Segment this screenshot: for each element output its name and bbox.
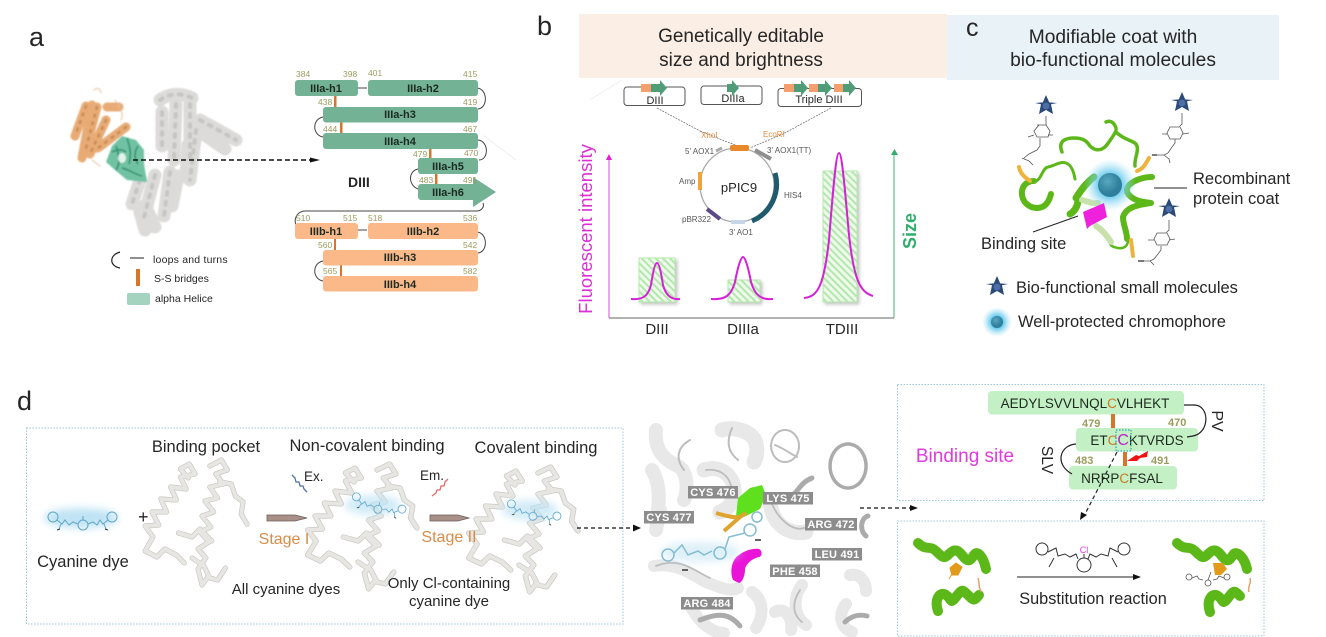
x labels: TDIII	[826, 321, 858, 338]
residue numbers: 415	[463, 69, 477, 79]
numbers: 479	[1082, 418, 1100, 430]
x labels: DIIIa	[727, 321, 759, 338]
stage arrows	[267, 515, 469, 521]
headings: Binding pocket	[152, 438, 261, 456]
pocket protein	[145, 460, 247, 585]
numbers: 483	[1075, 455, 1093, 467]
residue numbers	[296, 68, 478, 276]
linker molecules	[1022, 113, 1189, 265]
plasmid map pPIC9: EcoRI	[763, 130, 785, 139]
residue tags: LEU 491	[815, 549, 859, 561]
arrow pocket view to binding site	[860, 505, 918, 511]
recombinant label	[1154, 170, 1291, 208]
green helices	[295, 80, 496, 207]
plasmid map pPIC9: HIS4	[784, 191, 802, 200]
binding site strand	[1083, 203, 1107, 229]
axes	[606, 149, 898, 318]
plasmid inserts: DIII	[646, 95, 664, 107]
panel b heading: Genetically editable	[658, 26, 824, 47]
residue tags: PHE 458	[772, 566, 818, 578]
residues	[736, 485, 766, 517]
panel d: binding process: Stage I	[259, 531, 309, 548]
dye	[44, 508, 118, 530]
panel d: binding process: Covalent binding	[475, 439, 597, 457]
plasmid map pPIC9: pBR322	[682, 215, 711, 224]
substitution reaction panel: Substitution reaction	[1019, 590, 1167, 608]
legend	[112, 252, 228, 305]
orange helices	[295, 223, 478, 292]
bridges and marker	[1111, 414, 1148, 466]
plasmid map pPIC9: 5' AOX1	[685, 147, 715, 156]
x labels: DIII	[645, 321, 669, 338]
helix names: IIIa-h6	[432, 187, 464, 199]
chart: intensity and size: Size	[900, 213, 920, 249]
panel d: binding process: Only Cl-containing	[388, 575, 510, 592]
residue tags: CYS 477	[646, 512, 692, 524]
helix names: IIIa-h5	[432, 161, 464, 173]
panel a: protein 3D structure	[75, 89, 236, 230]
helix names: IIIb-h2	[407, 226, 439, 238]
recombinant label: Recombinant	[1193, 170, 1291, 188]
residue tags: ARG 472	[807, 519, 855, 531]
panel d: binding process	[26, 428, 623, 624]
panel d: binding process: Stage II	[421, 529, 477, 546]
reaction arrow	[1017, 574, 1141, 580]
loops	[1061, 405, 1206, 474]
panel d label: d	[17, 386, 32, 416]
dashed arrow to reaction	[1080, 452, 1117, 520]
orange linkers	[1019, 158, 1149, 256]
helix names: IIIb-h3	[384, 252, 416, 264]
residue tags: CYS 476	[690, 487, 736, 499]
plasmid inserts: Triple DIII	[795, 94, 843, 106]
excitation and emission: Em.	[420, 468, 444, 483]
binding label	[981, 216, 1078, 253]
binding site sequence panel: PV	[1208, 410, 1225, 432]
binding site sequence panel	[898, 384, 1264, 500]
residue numbers: 444	[323, 124, 337, 134]
panel c legend	[982, 276, 1238, 337]
chromophore	[1084, 159, 1136, 211]
heading: Binding site	[916, 446, 1014, 467]
legend: alpha Helice	[155, 293, 213, 305]
panel c legend: Well-protected chromophore	[1018, 313, 1226, 331]
plasmid map pPIC9: pPIC9	[721, 180, 757, 195]
green ribbon	[1022, 121, 1152, 248]
panel d: binding process: +	[138, 507, 149, 527]
helix names: IIIb-h4	[384, 279, 417, 291]
helix names: IIIa-h4	[384, 136, 417, 148]
sequences: AEDYLSVVLNQLCVLHEKT	[1001, 396, 1169, 411]
diagram: DIII topology	[295, 68, 496, 292]
plasmid map pPIC9: XhoI	[701, 131, 717, 140]
arrow: structure to DIII	[133, 158, 320, 162]
binding site sequence panel: ETCCKTVRDS	[1090, 432, 1184, 449]
residue numbers: 479	[413, 149, 427, 159]
notes: All cyanine dyes	[232, 581, 340, 598]
panel b label: b	[537, 11, 552, 41]
panel c heading	[947, 14, 1279, 80]
substitution reaction panel	[898, 521, 1264, 636]
residue numbers: 582	[463, 266, 477, 276]
stars	[1035, 95, 1057, 114]
legend: loops and turns	[153, 254, 228, 266]
numbers: 470	[1168, 417, 1186, 429]
residue numbers: 483	[419, 175, 433, 185]
DIII label: DIII	[348, 174, 370, 190]
panel b heading: size and brightness	[659, 50, 823, 71]
residue numbers: 438	[318, 97, 332, 107]
plasmid map pPIC9: 3' AOX1(TT)	[767, 146, 812, 155]
panel c legend: Bio-functional small molecules	[1016, 279, 1238, 297]
arrow d to pocket view	[577, 524, 641, 532]
panel d: binding process: Cyanine dye	[37, 553, 129, 571]
recombinant label: protein coat	[1193, 190, 1280, 208]
helix names: IIIb-h1	[310, 226, 342, 238]
binding site sequence panel: NRRPCFSAL	[1081, 471, 1163, 486]
residue numbers: 401	[368, 68, 382, 78]
product peptide	[1177, 543, 1250, 612]
intensity curves	[631, 153, 873, 299]
dye in pocket	[660, 512, 762, 562]
residue numbers: 470	[464, 148, 478, 158]
chart: intensity and size	[575, 143, 920, 338]
panel d: binding process: Non-covalent binding	[289, 437, 445, 455]
residue numbers: 560	[318, 240, 332, 250]
numbers	[1075, 417, 1186, 467]
helix names: IIIa-h3	[384, 109, 416, 121]
legend: S-S bridges	[154, 273, 209, 285]
residue numbers: 467	[463, 124, 477, 134]
grey protein body	[132, 94, 236, 230]
dye structure	[1036, 543, 1130, 572]
residue tags: ARG 484	[683, 598, 731, 610]
residue numbers: 510	[296, 213, 310, 223]
residue numbers: 565	[323, 266, 337, 276]
panel d: binding process: cyanine dye	[409, 593, 489, 610]
plasmid map pPIC9: 3' AO1	[729, 228, 753, 237]
panel c heading: Modifiable coat with	[1029, 27, 1197, 48]
binding label: Binding site	[981, 235, 1066, 253]
panel b heading	[579, 14, 947, 78]
panel c heading: c	[966, 14, 978, 42]
grey ribbons	[652, 428, 868, 633]
substitution reaction panel: Cl	[1080, 545, 1088, 555]
binding site sequence panel: SLV	[1038, 446, 1055, 475]
orange domain	[75, 89, 126, 166]
teal domain	[106, 136, 147, 182]
numbers: 491	[1151, 455, 1169, 467]
non-covalent protein	[308, 464, 417, 589]
helix names: IIIa-h2	[407, 83, 439, 95]
x labels	[645, 321, 858, 338]
y axis titles: Fluorescent intensity	[575, 143, 596, 314]
panel a label: a	[29, 22, 45, 52]
size bars	[639, 171, 857, 302]
residue numbers: 536	[463, 213, 477, 223]
pocket close-up view	[644, 428, 868, 633]
covalent protein	[469, 467, 578, 592]
excitation and emission	[292, 468, 448, 496]
panel c: recombinant protein coat	[981, 92, 1291, 265]
residue numbers: 384	[296, 69, 310, 79]
residue numbers: 398	[343, 69, 357, 79]
connector loops	[295, 88, 486, 281]
plasmid map pPIC9	[679, 130, 812, 237]
panel c heading: bio-functional molecules	[1010, 50, 1216, 71]
sequence boxes	[988, 391, 1198, 490]
residue tags	[644, 486, 862, 610]
S-S bridges	[334, 96, 438, 276]
plasmid inserts: DIIIa	[721, 93, 745, 105]
residue numbers: 491	[463, 175, 477, 185]
helix names: IIIa-h1	[310, 83, 342, 95]
plasmid inserts	[624, 80, 862, 148]
residue numbers: 542	[463, 240, 477, 250]
residue numbers: 419	[463, 97, 477, 107]
residue numbers: 518	[368, 213, 382, 223]
reactant peptide	[918, 543, 986, 611]
plasmid map pPIC9: Amp	[679, 177, 696, 186]
residue numbers: 515	[343, 213, 357, 223]
residue tags: LYS 475	[766, 493, 810, 505]
helix names	[310, 83, 464, 291]
excitation and emission: Ex.	[304, 469, 324, 484]
